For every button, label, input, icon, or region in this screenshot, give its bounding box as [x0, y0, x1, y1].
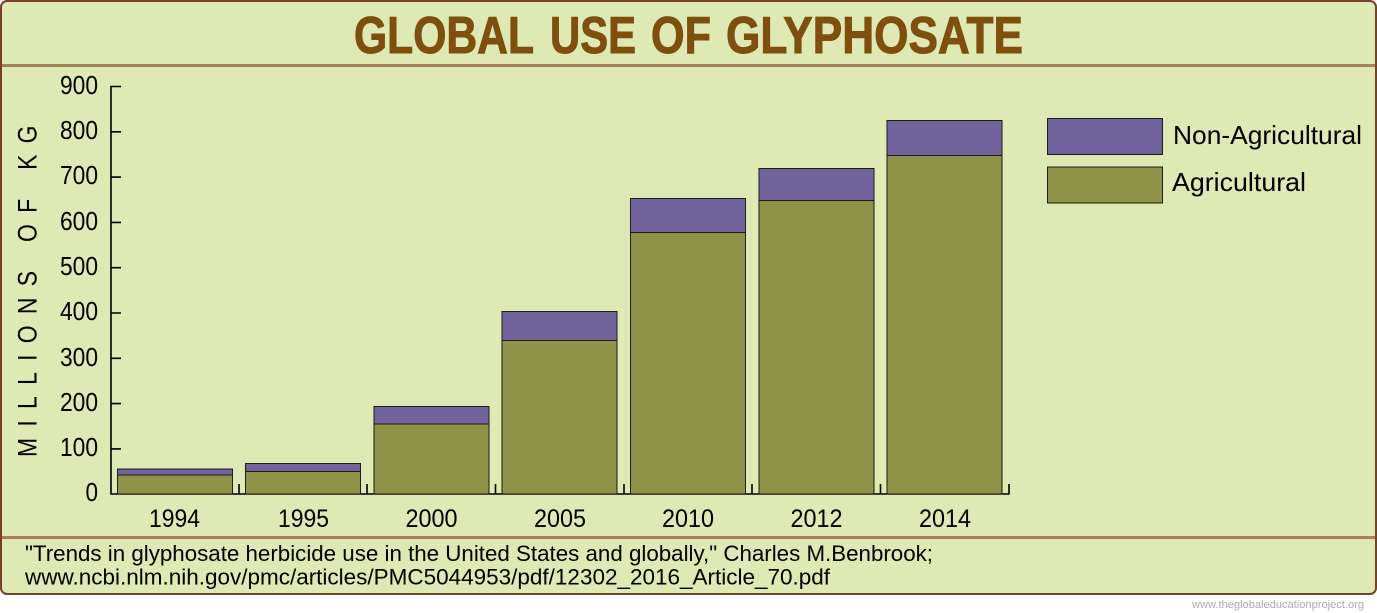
y-axis labels: 300: [60, 342, 98, 372]
title: OF: [651, 7, 711, 65]
x-axis labels: 2010: [662, 505, 714, 533]
legend: non-agricultural: [1048, 118, 1362, 154]
x-axis labels: 2005: [534, 505, 586, 533]
source citation: [24, 541, 933, 590]
y-axis labels: 600: [60, 206, 98, 236]
bar 1995: [246, 464, 360, 494]
x-axis labels: [149, 505, 971, 533]
legend: agricultural: Agricultural: [1172, 167, 1306, 197]
bars: stacked agricultural and non-agricultural: [118, 120, 1002, 494]
y-axis labels: 100: [60, 432, 98, 462]
bar chart: [60, 70, 1010, 533]
website credit: www.theglobaleducationproject.org: [1191, 599, 1364, 611]
title: GLOBAL: [354, 7, 534, 65]
title: GLYPHOSATE: [726, 7, 1023, 65]
x-axis labels: 1994: [149, 505, 200, 533]
y-axis labels: [60, 70, 98, 507]
bar 2014: [887, 120, 1002, 494]
x-axis labels: 2014: [919, 505, 971, 533]
source citation: www.ncbi.nlm.nih.gov/pmc/articles/PMC5044953/pdf/12302_2016_Article_70.pdf: [24, 564, 831, 590]
bar 2010: [630, 198, 746, 494]
axes and ticks: [111, 86, 1010, 494]
y-axis labels: 500: [60, 251, 98, 281]
bar 2012: [759, 168, 874, 494]
y-axis labels: 200: [60, 387, 98, 417]
y-axis labels: 700: [60, 160, 98, 190]
bar 2000: [374, 406, 489, 494]
legend: agricultural: [1048, 167, 1306, 203]
title: [354, 7, 1023, 65]
x-axis labels: 2012: [790, 505, 842, 533]
y-axis labels: 800: [60, 115, 98, 145]
y-axis labels: 0: [86, 477, 98, 507]
x-axis labels: 1995: [278, 505, 329, 533]
y-axis labels: 900: [60, 70, 98, 100]
bar 1994: [118, 469, 232, 494]
y-axis labels: 400: [60, 296, 98, 326]
bar 2005: [502, 312, 617, 494]
x-axis labels: 2000: [406, 505, 458, 533]
title: USE: [550, 7, 636, 65]
legend: [1048, 118, 1362, 203]
legend: non-agricultural: Non-Agricultural: [1173, 120, 1362, 150]
y-axis title: MILLIONS OF KG: [13, 125, 43, 457]
source citation: "Trends in glyphosate herbicide use in the United States and globally," Charles M.Benbrook;: [25, 541, 933, 566]
